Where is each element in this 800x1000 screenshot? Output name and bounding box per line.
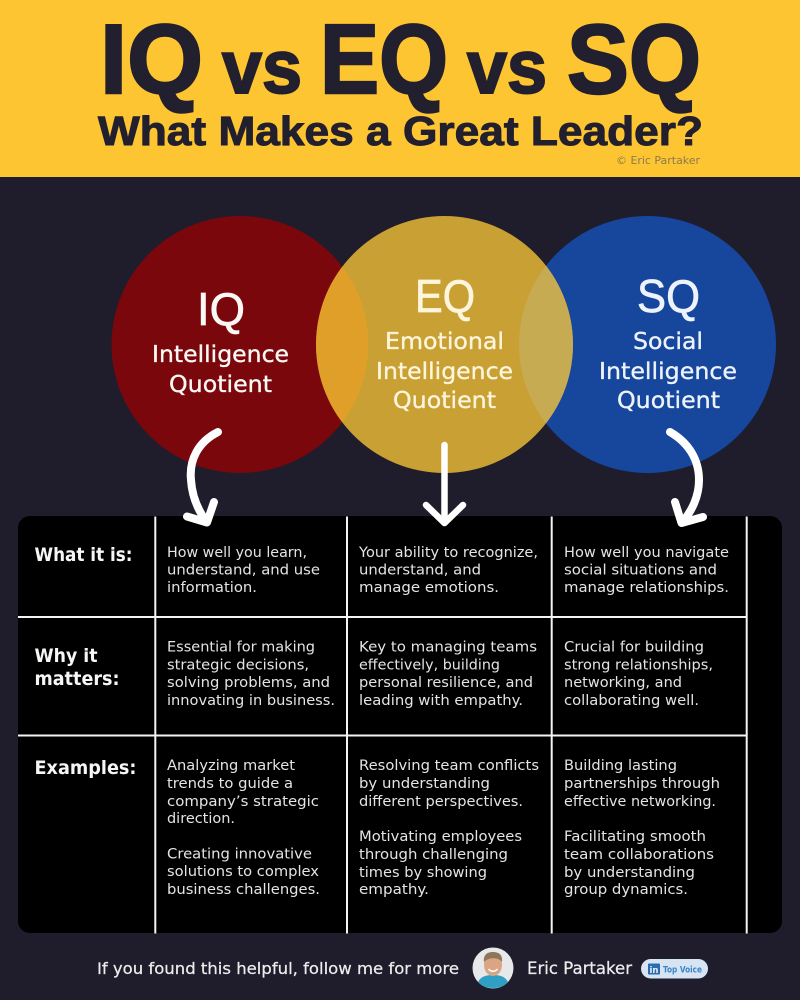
cell: EQ what it is: understand, and <box>359 562 481 578</box>
EQ label <box>376 270 513 414</box>
SQ label: Social <box>633 327 703 355</box>
EQ label: EQ <box>415 270 475 322</box>
cell: IQ examples: solutions to complex <box>167 864 319 880</box>
cell: SQ why it matters: Crucial for building <box>564 640 704 656</box>
title: SQ <box>567 4 701 114</box>
author name: Eric Partaker <box>527 959 632 979</box>
cell: SQ examples: effective networking. <box>564 794 716 810</box>
venn diagram <box>112 216 776 473</box>
SQ label: Quotient <box>617 386 720 414</box>
cell: EQ examples: through challenging <box>359 847 508 863</box>
cell: SQ examples <box>564 758 720 898</box>
cell: EQ why it matters <box>359 640 537 709</box>
cell: EQ what it is: manage emotions. <box>359 580 499 596</box>
title: vs <box>222 25 302 109</box>
title <box>100 4 701 114</box>
cell: IQ why it matters: Essential for making <box>167 640 315 656</box>
row label: why it matters: matters: <box>34 668 120 690</box>
EQ label: Emotional <box>385 327 504 355</box>
cell: SQ examples: Building lasting <box>564 758 677 774</box>
cell: SQ what it is: social situations and <box>564 562 717 578</box>
cell: EQ examples: by understanding <box>359 776 490 792</box>
subtitle: What Makes a Great Leader? <box>98 108 703 154</box>
cell: EQ examples: different perspectives. <box>359 794 523 810</box>
comparison table <box>18 516 782 934</box>
arrow: EQ to table <box>426 445 463 523</box>
title: EQ <box>320 4 448 114</box>
cell: IQ what it is: understand, and use <box>167 562 320 578</box>
linkedin top voice badge <box>641 959 708 978</box>
cell: IQ examples: business challenges. <box>167 882 320 898</box>
cell: EQ why it matters: Key to managing teams <box>359 640 537 656</box>
cell: SQ examples: partnerships through <box>564 776 720 792</box>
cell: SQ why it matters: strong relationships, <box>564 658 713 674</box>
row label: why it matters <box>34 645 120 690</box>
cell: SQ what it is: How well you navigate <box>564 545 729 561</box>
row label: examples: Examples: <box>34 757 136 779</box>
circle: SQ <box>519 216 776 473</box>
cell: EQ examples <box>359 758 539 898</box>
cell: IQ what it is: How well you learn, <box>167 545 307 561</box>
cell: SQ what it is: manage relationships. <box>564 580 729 596</box>
SQ label: Intelligence <box>599 357 737 385</box>
row label: what it is: What it is: <box>34 544 132 566</box>
SQ label <box>599 270 737 414</box>
EQ label: Quotient <box>393 386 496 414</box>
footer <box>97 948 708 988</box>
overlap: IQ and EQ <box>316 267 368 422</box>
IQ label <box>152 283 289 398</box>
cell: SQ what it is <box>564 545 729 596</box>
row label: why it matters: Why it <box>34 645 98 667</box>
cell: EQ why it matters: leading with empathy. <box>359 693 523 709</box>
title: vs <box>467 25 547 109</box>
cell: SQ why it matters: networking, and <box>564 675 682 691</box>
circle: EQ <box>316 216 573 473</box>
header band <box>0 0 800 177</box>
cell: IQ why it matters: strategic decisions, <box>167 658 309 674</box>
cell: SQ why it matters: collaborating well. <box>564 693 699 709</box>
cell: IQ what it is <box>167 545 320 596</box>
linkedin top voice badge: Top Voice <box>663 966 702 976</box>
footer call to action: If you found this helpful, follow me for more <box>97 959 459 978</box>
linkedin top voice badge: in <box>650 966 658 976</box>
IQ label: Quotient <box>169 370 272 398</box>
cell: EQ examples: times by showing <box>359 865 487 881</box>
title: IQ <box>100 4 203 114</box>
cell: IQ why it matters: solving problems, and <box>167 675 330 691</box>
cell: EQ why it matters: effectively, building <box>359 658 500 674</box>
cell: IQ what it is: information. <box>167 580 257 596</box>
cell: SQ why it matters <box>564 640 713 709</box>
cell: EQ examples: Resolving team conflicts <box>359 758 539 774</box>
cell: EQ examples: empathy. <box>359 882 429 898</box>
avatar <box>472 948 514 988</box>
cell: IQ examples <box>167 758 320 898</box>
SQ label: SQ <box>637 270 700 322</box>
cell: IQ examples: direction. <box>167 811 235 827</box>
overlap: EQ and SQ <box>519 266 573 423</box>
cell: SQ examples: Facilitating smooth <box>564 829 706 845</box>
cell: IQ examples: Analyzing market <box>167 758 295 774</box>
cell: IQ examples: company’s strategic <box>167 794 319 810</box>
arrow: IQ to table <box>187 432 218 522</box>
cell: EQ examples: Motivating employees <box>359 829 522 845</box>
circle: IQ <box>112 216 368 473</box>
cell: EQ what it is <box>358 545 538 596</box>
cell: IQ why it matters <box>167 640 335 709</box>
cell: SQ examples: team collaborations <box>564 847 714 863</box>
arrow: SQ to table <box>670 432 703 523</box>
cell: SQ examples: group dynamics. <box>564 882 688 898</box>
cell: SQ examples: by understanding <box>564 865 695 881</box>
copyright: © Eric Partaker <box>616 154 700 167</box>
cell: EQ why it matters: personal resilience, and <box>359 675 533 691</box>
cell: IQ examples: Creating innovative <box>167 846 312 862</box>
EQ label: Intelligence <box>376 357 513 385</box>
cell: EQ what it is: Your ability to recognize, <box>358 545 538 561</box>
IQ label: Intelligence <box>152 340 289 368</box>
cell: IQ why it matters: innovating in business. <box>167 693 335 709</box>
IQ label: IQ <box>197 283 245 335</box>
cell: IQ examples: trends to guide a <box>167 776 293 792</box>
